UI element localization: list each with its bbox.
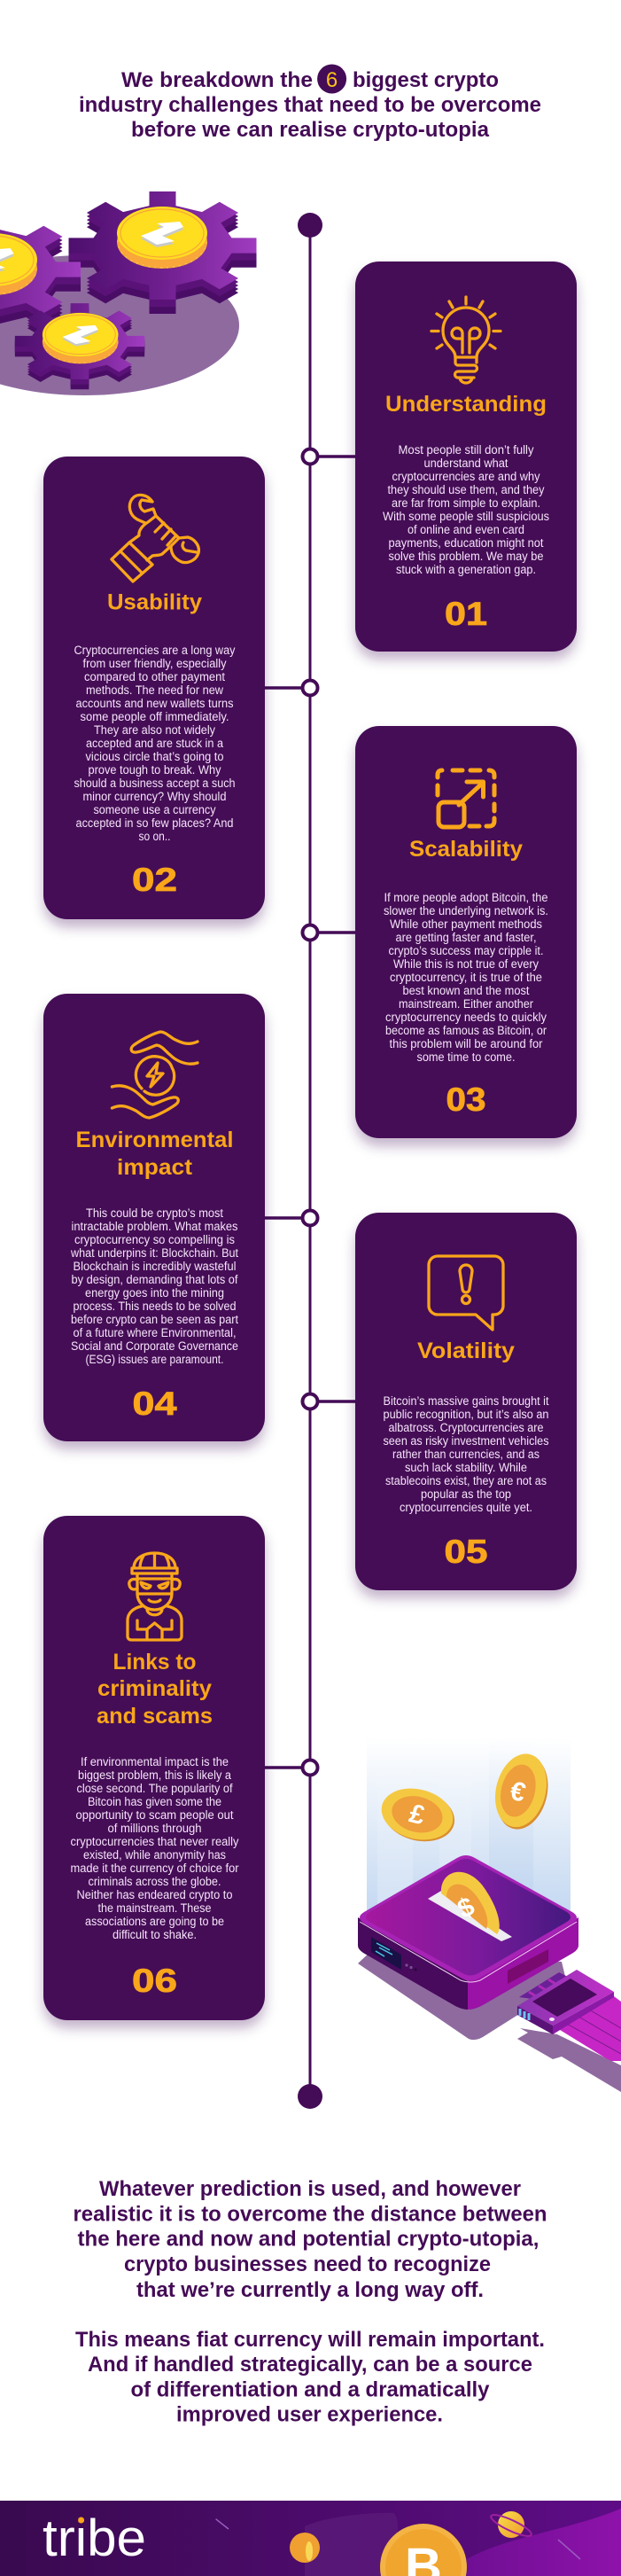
closing text: Whatever prediction is used, and however: [99, 2177, 521, 2201]
panel: scalability: [355, 726, 577, 1138]
closing text: This means fiat currency will remain important.: [75, 2328, 545, 2352]
body text: associations are going to be: [85, 1915, 224, 1928]
number 01: 01: [445, 596, 487, 632]
body text: While other payment methods: [390, 917, 542, 931]
body text: of a future where Environmental,: [73, 1326, 236, 1339]
badge: number six: [317, 64, 346, 94]
streaks: [216, 2519, 580, 2559]
shadows: [358, 1950, 567, 2040]
body text: slower the underlying network is.: [384, 904, 548, 917]
badge: number six: 6: [326, 68, 338, 92]
number 06: 06: [132, 1963, 177, 1999]
body text: made it the currency of choice for: [71, 1862, 239, 1875]
panel: understanding: [355, 262, 577, 652]
body text: Cryptocurrencies are a long way: [74, 644, 236, 657]
body text: While this is not true of every: [393, 957, 539, 971]
title: [79, 64, 541, 142]
body text: albatross. Cryptocurrencies are: [388, 1421, 544, 1434]
title: before we can realise crypto-utopia: [131, 118, 490, 142]
body text: stablecoins exist, they are not as: [385, 1474, 547, 1487]
body text: of millions through: [108, 1822, 202, 1835]
number 03: 03: [446, 1081, 485, 1118]
body text: accepted in so few places? And: [76, 816, 234, 830]
body text: by design, demanding that lots of: [71, 1273, 238, 1286]
body text: understand what: [423, 457, 508, 470]
terminal side faces: [358, 1917, 468, 2010]
body text: from user friendly, especially: [83, 657, 227, 670]
icon: light bulb: [431, 297, 501, 383]
coin in slot: $: [454, 1892, 479, 1924]
coin: pound: £: [407, 1799, 428, 1831]
footer banner: [0, 2501, 621, 2576]
body text: biggest problem, this is likely a: [78, 1768, 231, 1782]
title: industry challenges that need to be overcome: [79, 93, 541, 117]
body text: the mainstream. These: [97, 1901, 211, 1915]
body text: cryptocurrency so compelling is: [74, 1233, 235, 1246]
light beam: [367, 1737, 571, 1919]
icon: planet: [489, 2511, 533, 2540]
body text: With some people still suspicious: [383, 510, 549, 523]
heading: environmental impact: impact: [117, 1155, 193, 1180]
number 05: 05: [445, 1534, 487, 1570]
body text: Bitcoin has given some the: [88, 1795, 221, 1808]
body text: [71, 1755, 239, 1941]
heading: environmental impact: [76, 1128, 234, 1180]
illustration: gears with coins: [0, 191, 257, 395]
body text: [383, 443, 549, 576]
body text: Neither has endeared crypto to: [76, 1888, 232, 1901]
body text: public recognition, but it’s also an: [383, 1408, 549, 1421]
body text: someone use a currency: [94, 803, 216, 816]
coin: euro: €: [507, 1776, 529, 1808]
terminal top face: [360, 1855, 577, 1980]
icon: scale arrow: [438, 770, 494, 827]
screen and indicators: [371, 1937, 417, 1971]
body text: criminals across the globe.: [89, 1875, 221, 1888]
body text: process. This needs to be solved: [73, 1300, 236, 1313]
body text: this problem will be around for: [390, 1037, 543, 1050]
icon: warning speech bubble: [429, 1256, 503, 1330]
body text: cryptocurrency, it is true of the: [390, 971, 542, 984]
body text: they should use them, and they: [388, 483, 545, 496]
logo: tribe: tribe: [43, 2510, 146, 2567]
body text: should a business accept a such: [74, 777, 236, 790]
body text: of online and even card: [408, 523, 524, 536]
body text: solve this problem. We may be: [388, 550, 544, 563]
panel: environmental impact: [43, 994, 265, 1441]
body text: seen as risky investment vehicles: [383, 1434, 549, 1448]
closing text: crypto businesses need to recognize: [124, 2252, 491, 2276]
body text: mainstream. Either another: [399, 997, 533, 1011]
number 02: 02: [132, 862, 177, 898]
body text: intractable problem. What makes: [71, 1220, 238, 1233]
body text: This could be crypto’s most: [86, 1206, 223, 1220]
closing text: realistic it is to overcome the distance between: [73, 2203, 547, 2227]
number 04: 04: [133, 1386, 177, 1422]
coin in slot: [441, 1872, 500, 1934]
body text: vicious circle that’s going to: [85, 750, 223, 763]
closing text: improved user experience.: [176, 2403, 443, 2427]
heading: links to criminality and scams: Links to: [113, 1650, 197, 1674]
title: biggest crypto: [353, 68, 499, 92]
coin: euro: [487, 1748, 555, 1835]
body text: existed, while anonymity has: [83, 1848, 226, 1862]
body text: some people off immediately.: [80, 710, 229, 723]
side port: [508, 1949, 548, 1984]
panel: links to criminality and scams: [43, 1516, 265, 2020]
body text: difficult to shake.: [113, 1928, 197, 1941]
body text: close second. The popularity of: [76, 1782, 233, 1795]
panel: usability: [43, 457, 265, 919]
heading: volatility: Volatility: [417, 1339, 515, 1363]
body text: cryptocurrencies are and why: [392, 470, 540, 483]
body text: before crypto can be seen as part: [71, 1313, 238, 1326]
body text: popular as the top: [421, 1487, 511, 1501]
body text: Most people still don’t fully: [399, 443, 534, 457]
body text: are far from simple to explain.: [392, 496, 540, 510]
body text: cryptocurrency needs to quickly: [385, 1011, 547, 1024]
heading: links to criminality and scams: criminality: [97, 1676, 212, 1701]
body text: some time to come.: [416, 1050, 516, 1064]
body text: cryptocurrencies quite yet.: [400, 1501, 532, 1514]
body text: best known and the most: [402, 984, 530, 997]
body text: such lack stability. While: [405, 1461, 527, 1474]
body text: minor currency? Why should: [83, 790, 227, 803]
body text: Blockchain is incredibly wasteful: [73, 1260, 236, 1273]
heading: environmental impact: Environmental: [76, 1128, 234, 1152]
body text: accepted and are stuck in a: [86, 737, 223, 750]
body text: what underpins it: Blockchain. But: [70, 1246, 238, 1260]
body text: [384, 891, 548, 1064]
title: We breakdown the: [121, 68, 313, 92]
body text: If environmental impact is the: [81, 1755, 229, 1768]
body text: crypto’s success may cripple it.: [388, 944, 544, 957]
coin: pound: [376, 1781, 461, 1848]
body text: If more people adopt Bitcoin, the: [384, 891, 547, 904]
body text: prove tough to break. Why: [89, 763, 221, 777]
heading: links to criminality and scams: and scams: [97, 1704, 213, 1729]
body text: are getting faster and faster,: [395, 931, 537, 944]
body text: payments, education might not: [388, 536, 544, 550]
icon: masked thief: [128, 1553, 182, 1640]
card reader: [517, 1970, 621, 2061]
closing text: of differentiation and a dramatically: [131, 2378, 490, 2402]
body text: They are also not widely: [94, 723, 215, 737]
heading: scalability: Scalability: [409, 837, 523, 862]
body text: accounts and new wallets turns: [76, 697, 234, 710]
body text: [383, 1394, 549, 1514]
body text: Social and Corporate Governance: [71, 1339, 238, 1353]
closing text: the here and now and potential crypto-utopia,: [78, 2228, 539, 2252]
body text: methods. The need for new: [86, 683, 223, 697]
icon: hand with wrench: [112, 495, 198, 582]
panel: volatility: [355, 1213, 577, 1590]
closing text: that we’re currently a long way off.: [136, 2278, 484, 2302]
illustration: coin payment terminal: [358, 1737, 621, 2092]
coin slot: [428, 1891, 512, 1941]
heading: usability: Usability: [107, 590, 202, 615]
closing text: And if handled strategically, can be a source: [88, 2353, 532, 2377]
body text: so on..: [138, 830, 170, 843]
body text: become as famous as Bitcoin, or: [385, 1024, 547, 1037]
heading: links to criminality and scams: [97, 1650, 213, 1729]
icon: hands and energy: [112, 1032, 198, 1118]
body text: [70, 1206, 238, 1366]
body text: cryptocurrencies that never really: [71, 1835, 239, 1848]
coin: bitcoin: [380, 2524, 467, 2576]
body text: opportunity to scam people out: [76, 1808, 234, 1822]
body text: [74, 644, 236, 843]
body text: energy goes into the mining: [85, 1286, 224, 1300]
body text: rather than currencies, and as: [392, 1448, 539, 1461]
heading: understanding: Understanding: [385, 392, 547, 417]
coin: small orange: [290, 2533, 320, 2563]
timeline: [265, 213, 355, 2109]
body text: (ESG) issues are paramount.: [85, 1353, 223, 1366]
closing text: [73, 2177, 547, 2427]
body text: Bitcoin’s massive gains brought it: [383, 1394, 549, 1408]
body text: compared to other payment: [84, 670, 225, 683]
body text: stuck with a generation gap.: [396, 563, 536, 576]
